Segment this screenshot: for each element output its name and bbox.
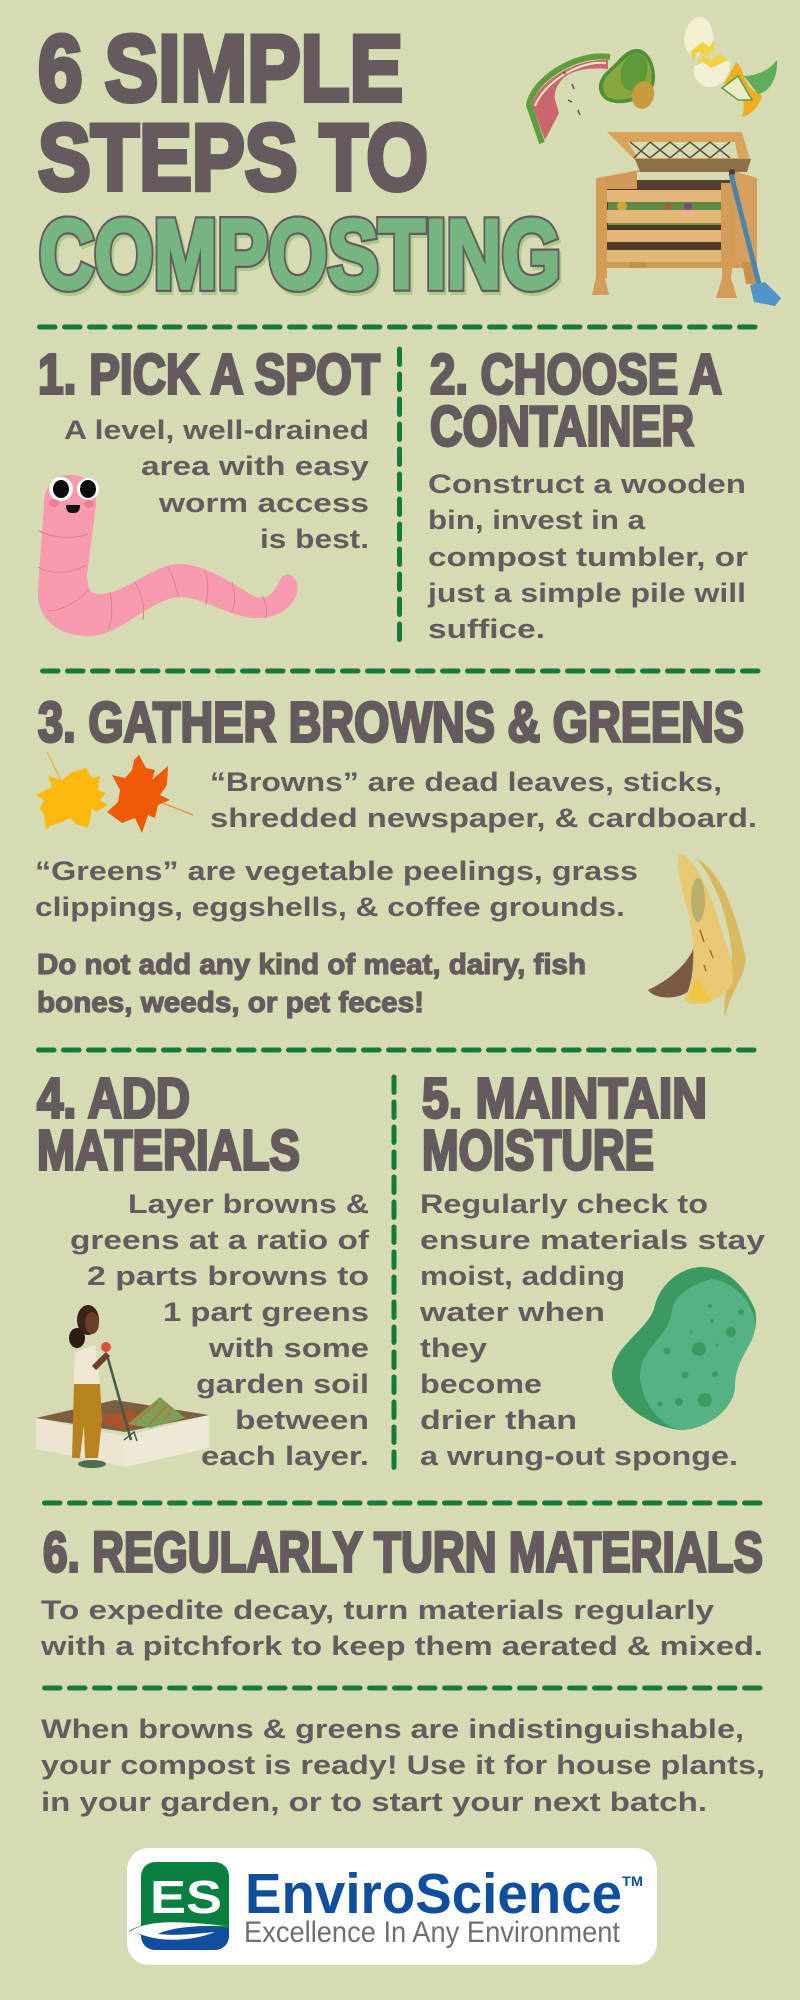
heading: step 4: MATERIALS	[37, 1118, 300, 1182]
text: step 6 body: To expedite decay, turn materials regularly	[41, 1595, 714, 1625]
title: 6 SIMPLE	[38, 16, 403, 120]
heading: step 5: MOISTURE	[422, 1118, 654, 1182]
heading: step 2: CONTAINER	[430, 394, 694, 458]
divider	[44, 1500, 763, 1506]
text: step 4 body: with some	[208, 1333, 369, 1363]
panel: step 4	[36, 1066, 370, 1471]
panel: logo	[127, 1848, 657, 1965]
text: step 2 body: suffice.	[428, 614, 545, 644]
icon: gardener with compost bed	[36, 1305, 209, 1468]
icon: worm	[38, 475, 297, 636]
panel: step 2	[427, 342, 749, 644]
text: greens: “Greens” are vegetable peelings, grass	[35, 856, 638, 886]
text: browns	[210, 767, 757, 833]
text: closing note: your compost is ready! Use it for house plants,	[41, 1750, 765, 1780]
text: step 2 body: bin, invest in a	[428, 505, 646, 535]
panel: step 6	[40, 1520, 763, 1661]
text: step 1 body	[64, 415, 369, 554]
text: step 5 body: they	[420, 1333, 487, 1363]
logo tagline: Excellence In Any Environment	[244, 1916, 621, 1949]
text: step 2 body: Construct a wooden	[428, 469, 746, 499]
icon: autumn leaves	[36, 752, 193, 833]
divider	[397, 349, 402, 641]
logo wordmark: EnviroScience	[245, 1862, 622, 1926]
text: step 1 body: area with easy	[141, 451, 369, 481]
title	[38, 16, 563, 312]
title: STEPS TO	[38, 104, 428, 210]
text: step 5 body: ensure materials stay	[420, 1225, 765, 1255]
title: COMPOSTING	[41, 202, 563, 312]
text: step 5 body: water when	[419, 1297, 605, 1327]
text: step 1 body: is best.	[260, 524, 369, 554]
text: warning	[37, 949, 586, 1019]
text: step 4 body	[70, 1189, 370, 1471]
text: step 5 body: Regularly check to	[420, 1189, 708, 1219]
text: step 5 body: become	[420, 1369, 542, 1399]
icon: banana peel	[648, 853, 745, 1018]
text: step 5 body: a wrung-out sponge.	[420, 1441, 738, 1471]
title: COMPOSTING	[39, 199, 561, 309]
icon: fruit peel	[722, 60, 777, 117]
icon: shovel	[729, 172, 781, 306]
heading: step 4	[37, 1066, 300, 1182]
text: step 5 body	[419, 1189, 765, 1471]
panel: step 5	[419, 1066, 765, 1471]
panel: step 1	[38, 342, 380, 636]
text: step 4 body: 2 parts browns to	[87, 1261, 369, 1291]
text: step 5 body: moist, adding	[420, 1261, 625, 1291]
icon: food scraps	[529, 17, 777, 143]
icon: ES badge: ES	[150, 1871, 222, 1923]
text: step 2 body: just a simple pile will	[427, 578, 746, 608]
text: closing note	[41, 1714, 765, 1817]
divider	[44, 1686, 763, 1690]
trademark: TM	[622, 1873, 643, 1889]
text: step 1 body: worm access	[158, 488, 369, 518]
icon: avocado	[599, 49, 657, 111]
text: step 1 body: A level, well-drained	[64, 415, 369, 445]
text: closing note: in your garden, or to start your next batch.	[41, 1787, 707, 1817]
divider	[38, 1048, 756, 1052]
text: step 4 body: 1 part greens	[163, 1297, 369, 1327]
text: step 2 body: compost tumbler, or	[428, 542, 749, 572]
divider	[392, 1077, 396, 1468]
divider	[42, 668, 761, 674]
text: step 4 body: greens at a ratio of	[70, 1225, 370, 1255]
text: step 6 body	[40, 1595, 763, 1661]
text: browns: shredded newspaper, & cardboard.	[210, 803, 757, 833]
heading: step 2: 2. CHOOSE A	[430, 342, 722, 406]
text: step 5 body: drier than	[420, 1405, 577, 1435]
text: step 2 body	[427, 469, 749, 644]
text: warning: bones, weeds, or pet feces!	[37, 987, 424, 1019]
text: closing note: When browns & greens are indistinguishable,	[41, 1714, 744, 1744]
panel: step 3	[35, 690, 757, 1019]
icon: watermelon rind	[529, 56, 610, 143]
text: greens	[35, 856, 638, 922]
text: warning: Do not add any kind of meat, dairy, fish	[37, 949, 586, 981]
icon: sponge	[612, 1267, 756, 1430]
title: COMPOSTING	[39, 199, 561, 309]
text: greens: clippings, eggshells, & coffee grounds.	[35, 892, 625, 922]
divider	[40, 324, 757, 330]
text: step 6 body: with a pitchfork to keep them aerated & mixed.	[40, 1631, 763, 1661]
heading: step 1: 1. PICK A SPOT	[38, 342, 380, 406]
text: browns: “Browns” are dead leaves, sticks,	[210, 767, 722, 797]
text: step 4 body: between	[235, 1405, 369, 1435]
heading: step 5: 5. MAINTAIN	[422, 1066, 707, 1130]
heading: step 2	[430, 342, 722, 458]
heading: step 4: 4. ADD	[37, 1066, 190, 1130]
heading: step 5	[422, 1066, 707, 1182]
text: step 4 body: Layer browns &	[128, 1189, 369, 1219]
icon: ES badge	[129, 1862, 229, 1950]
text: step 4 body: each layer.	[201, 1441, 369, 1471]
text: step 4 body: garden soil	[196, 1369, 369, 1399]
icon: wooden compost bin	[592, 132, 757, 298]
icon: eggshell	[684, 17, 730, 87]
